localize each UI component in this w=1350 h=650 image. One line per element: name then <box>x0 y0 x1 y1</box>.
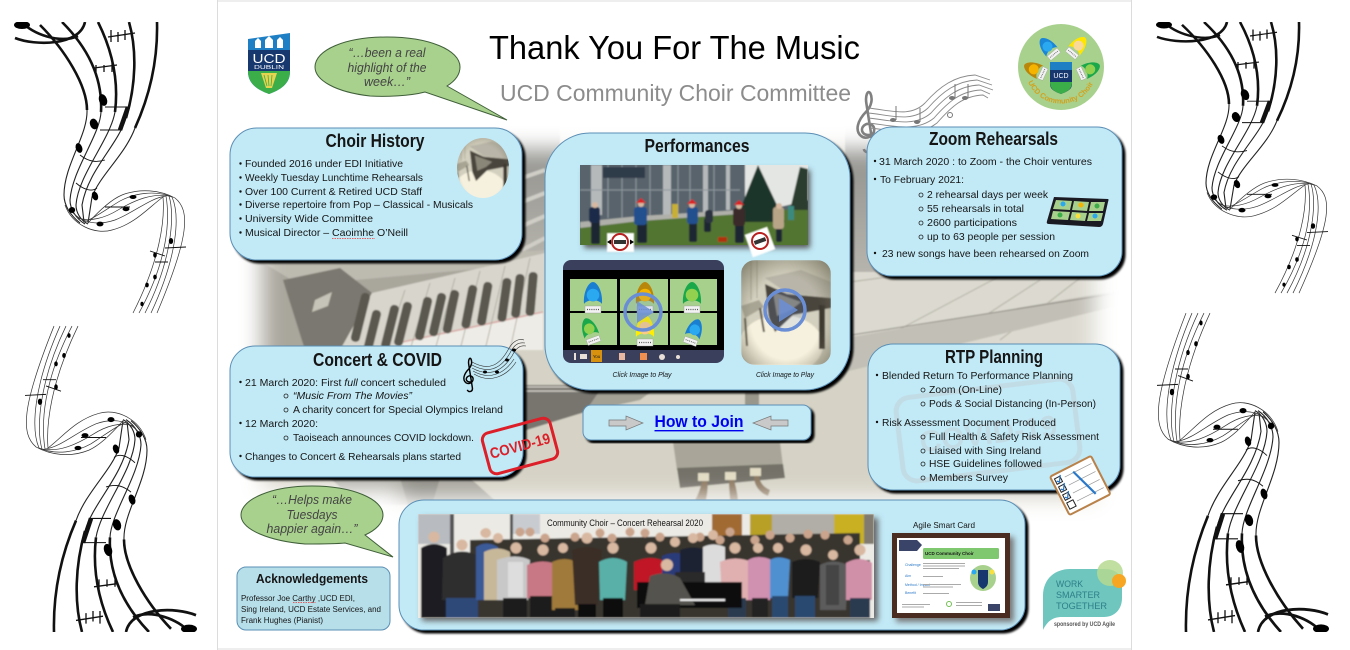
right-hand keys <box>852 272 1094 344</box>
speech bubble: quote one <box>315 37 507 120</box>
bullet list: concert timeline: A charity concert for Special Olympics Ireland <box>293 404 503 416</box>
watermark: faint COVID stamp <box>895 377 1081 483</box>
text block: thanks: Professor Joe Carthy ,UCD EDI, <box>241 594 355 603</box>
speech bubble: quote two: Tuesdays <box>286 508 338 522</box>
icon: UCD Community Choir badge <box>1018 24 1104 110</box>
bullet list: return to performance: Zoom (On-Line) <box>929 384 1002 396</box>
framed Agile smart card: Benefit <box>905 591 916 595</box>
icon: clipboard checklist <box>1050 456 1110 515</box>
photo: piano vignette <box>457 138 509 198</box>
bullet list: return to performance: Full Health & Safety Risk Assessment <box>929 431 1099 443</box>
icon: UCD Dublin crest: UCD <box>252 52 286 66</box>
photo: choir group at concert rehearsal <box>416 512 878 621</box>
bullet list: zoom stats <box>874 156 1092 260</box>
speech bubble: quote one: highlight of the <box>348 61 427 75</box>
heading: Concert & COVID: Concert & COVID <box>313 350 442 370</box>
video thumbnail: zoom grid: You <box>593 354 601 359</box>
panel: Concert & COVID <box>230 339 559 477</box>
icon: UCD Dublin crest: DUBLIN <box>254 65 285 71</box>
bullet list: return to performance: Pods & Social Distancing (In-Person) <box>929 398 1096 410</box>
bullet list: zoom stats: 31 March 2020 : to Zoom - the Choir ventures <box>879 156 1092 168</box>
video thumbnail: piano <box>741 260 831 365</box>
speech bubble: quote two <box>241 486 393 557</box>
framed Agile smart card: Aim <box>905 574 911 578</box>
left-hand piano keys <box>252 265 470 346</box>
panel: Choir History <box>230 128 522 260</box>
heading: Acknowledgements: Acknowledgements <box>256 571 368 586</box>
framed Agile smart card: UCD Community Choir <box>925 551 974 556</box>
subtitle: UCD Community Choir Committee <box>500 80 851 106</box>
heading: Zoom Rehearsals: Zoom Rehearsals <box>929 129 1058 149</box>
bullet list: zoom stats: 23 new songs have been rehearsed on Zoom <box>882 248 1089 260</box>
logo: Work Smarter Together: WORK <box>1056 579 1084 590</box>
bullet list: return to performance: Members Survey <box>929 472 1009 484</box>
icon: social distancing sign right <box>745 227 775 257</box>
bullet list: history: Weekly Tuesday Lunchtime Rehearsals <box>245 172 423 184</box>
icon: social distancing sign left <box>607 233 634 252</box>
framed Agile smart card: Method / Impact <box>905 583 930 587</box>
decoration: music ribbon bottom left <box>25 326 197 633</box>
text block: thanks <box>241 594 381 625</box>
speech bubble: quote two: “…Helps make <box>272 493 352 507</box>
slide background sheet <box>217 0 1132 650</box>
logo: Work Smarter Together: SMARTER <box>1056 590 1100 601</box>
bullet list: return to performance: Risk Assessment Document Produced <box>882 417 1056 429</box>
bullet list: return to performance: Blended Return To Performance Planning <box>882 370 1073 382</box>
speech bubble: quote one: “…been a real <box>348 46 427 60</box>
bullet list: history: Diverse repertoire from Pop – Classical - Musicals <box>245 199 473 211</box>
panel: Zoom Rehearsals <box>867 127 1122 276</box>
icon: UCD Dublin crest <box>248 33 290 94</box>
bullet list: zoom stats: up to 63 people per session <box>927 231 1055 243</box>
lower floor and lyre <box>525 384 598 430</box>
bullet list: concert timeline: 21 March 2020: First full concert scheduled <box>245 377 446 389</box>
speech bubble: quote two: happier again…” <box>266 522 358 536</box>
caption: Agile Smart Card: Agile Smart Card <box>913 520 975 530</box>
link: How to Join: How to Join <box>654 413 744 431</box>
video thumbnail: zoom grid <box>563 260 724 363</box>
bullet list: concert timeline: 12 March 2020: <box>245 418 318 430</box>
stamp: COVID-19: COVID-19 <box>488 430 552 463</box>
panel: Acknowledgements <box>237 567 390 630</box>
framed Agile smart card: Challenge <box>905 563 921 567</box>
logo: Work Smarter Together: sponsored by UCD Agile <box>1054 621 1115 628</box>
bullet list: concert timeline: Taoiseach announces COVID lockdown. <box>293 432 474 444</box>
bullet list: concert timeline: Changes to Concert & Rehearsals plans started <box>245 451 461 463</box>
panel: RTP Planning <box>868 344 1120 515</box>
panel: How to Join <box>583 405 811 440</box>
arrow: right-pointing <box>609 416 643 430</box>
bullet list: history: Over 100 Current & Retired UCD Staff <box>245 186 422 198</box>
decorative sheet music behind Zoom panel <box>858 75 993 152</box>
bullet list: zoom stats: 2600 participations <box>927 217 1017 229</box>
framed Agile smart card <box>892 533 1014 622</box>
bullet list: concert timeline: “Music From The Movies” <box>293 390 412 402</box>
icon: treble clef and staff <box>464 339 526 392</box>
decoration: music ribbon bottom right <box>1157 313 1329 633</box>
text block: thanks: Sing Ireland, UCD Estate Services, and <box>241 605 381 614</box>
bullet list: return to performance: Liaised with Sing Ireland <box>929 445 1041 457</box>
decoration: music ribbon top left <box>14 21 186 313</box>
heading: Choir History: Choir History <box>326 131 424 151</box>
heading: RTP Planning: RTP Planning <box>945 347 1043 367</box>
icon: UCD Community Choir badge: UCD <box>1053 73 1069 80</box>
text block: thanks: Frank Hughes (Pianist) <box>241 616 323 625</box>
caption: click image right: Click Image to Play <box>756 370 815 379</box>
arrow: left-pointing <box>753 416 788 430</box>
heading: Performances: Performances <box>644 136 750 156</box>
watermark: faint COVID stamp: COVID-19 <box>918 410 1059 459</box>
bullet list: concert timeline <box>239 377 503 463</box>
logo: Work Smarter Together: TOGETHER <box>1056 601 1107 612</box>
caption: photo title: Community Choir – Concert Rehearsal 2020 <box>547 518 703 528</box>
stamp: COVID-19 <box>481 417 559 475</box>
speech bubble: quote one: week…” <box>364 75 411 89</box>
icon: tablet with zoom grid <box>1047 197 1108 227</box>
caption: click image left: Click Image to Play <box>612 370 673 379</box>
icon: UCD Community Choir badge: UCD Community Choir <box>1028 80 1092 104</box>
bullet list: history <box>239 158 473 239</box>
logo: Work Smarter Together <box>1043 560 1126 630</box>
bullet list: zoom stats: 55 rehearsals in total <box>927 203 1024 215</box>
bullet list: zoom stats: To February 2021: <box>880 174 964 186</box>
bullet list: zoom stats: 2 rehearsal days per week <box>927 189 1049 201</box>
bullet list: history: University Wide Committee <box>245 213 373 225</box>
panel: Performances <box>545 133 850 390</box>
background piano photograph <box>248 135 1109 509</box>
decoration: music ribbon top right <box>1156 21 1328 293</box>
bullet list: history: Founded 2016 under EDI Initiative <box>245 158 403 170</box>
title: Thank You For The Music <box>489 29 860 66</box>
bullet list: return to performance <box>876 370 1099 484</box>
photo: outdoor carol performance <box>578 163 810 257</box>
bullet list: return to performance: HSE Guidelines followed <box>929 458 1042 470</box>
bullet list: history: Musical Director – Caoimhe O’Neill <box>245 227 408 239</box>
panel: group photo and smart card <box>399 500 1025 630</box>
